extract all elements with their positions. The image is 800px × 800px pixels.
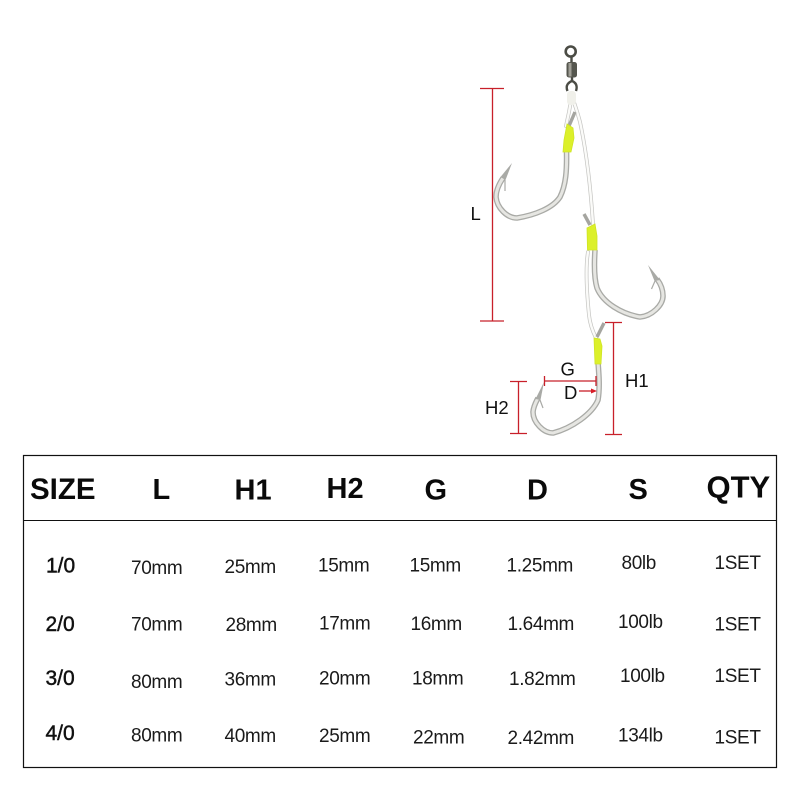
row 1/0 (46, 553, 761, 579)
table header row: L (152, 474, 170, 506)
dimension L: L (470, 203, 481, 224)
table header row: S (628, 474, 648, 506)
row 1/0: 15mm (410, 556, 461, 576)
row 3/0: 1.82mm (509, 669, 576, 690)
row 2/0: 100lb (618, 612, 663, 633)
row 3/0 (46, 666, 761, 693)
row 4/0: 134lb (618, 726, 663, 746)
dimension H1 (605, 322, 649, 434)
dimension H2 (485, 382, 527, 434)
table header row: SIZE (30, 473, 96, 506)
row 4/0: 1SET (714, 728, 761, 748)
row 3/0: 36mm (224, 670, 276, 690)
table header row: D (527, 474, 548, 506)
icon: middle hook (584, 214, 663, 317)
row 3/0: 3/0 (46, 667, 75, 690)
table header row: H1 (234, 474, 272, 506)
table frame (24, 456, 776, 768)
dimension H2: H2 (485, 397, 509, 418)
row 3/0: 1SET (714, 666, 761, 687)
row 1/0: 1.25mm (506, 556, 573, 576)
row 2/0: 2/0 (46, 613, 75, 636)
row 2/0 (46, 612, 761, 636)
row 4/0: 80mm (131, 726, 182, 746)
table header row: QTY (706, 470, 771, 504)
row 2/0: 1.64mm (508, 614, 574, 635)
row 2/0: 70mm (131, 614, 182, 636)
dimension L (470, 88, 504, 321)
icon: barrel swivel (566, 46, 577, 91)
row 1/0: 25mm (224, 557, 276, 578)
row 2/0: 1SET (714, 614, 761, 636)
row 3/0: 80mm (131, 672, 182, 693)
row 1/0: 1SET (714, 553, 761, 574)
row 4/0: 2.42mm (508, 728, 574, 749)
row 4/0 (46, 722, 761, 749)
hook rig illustration (496, 46, 663, 433)
row 1/0: 70mm (131, 558, 182, 579)
assist line (566, 91, 596, 338)
row 2/0: 16mm (410, 614, 462, 635)
table header row: G (424, 474, 447, 506)
row 1/0: 1/0 (46, 554, 75, 578)
row 3/0: 18mm (412, 668, 463, 690)
row 3/0: 20mm (319, 668, 370, 690)
row 4/0: 22mm (413, 728, 464, 748)
table header row: H2 (326, 473, 364, 505)
icon: lower hook (533, 323, 604, 433)
row 2/0: 28mm (226, 615, 277, 636)
dimension H1: H1 (625, 370, 649, 391)
row 4/0: 40mm (224, 726, 276, 747)
row 4/0: 4/0 (46, 722, 75, 745)
table header row (30, 470, 771, 506)
row 2/0: 17mm (319, 614, 370, 634)
dimension D with arrow: D (564, 382, 577, 403)
row 1/0: 15mm (318, 556, 369, 576)
icon: upper hook (496, 112, 575, 218)
dimension G (544, 358, 596, 386)
dimension D with arrow (564, 382, 597, 403)
dimension G: G (560, 358, 575, 380)
size table (24, 456, 776, 768)
row 3/0: 100lb (620, 666, 665, 687)
row 4/0: 25mm (319, 726, 370, 747)
row 1/0: 80lb (622, 553, 656, 574)
